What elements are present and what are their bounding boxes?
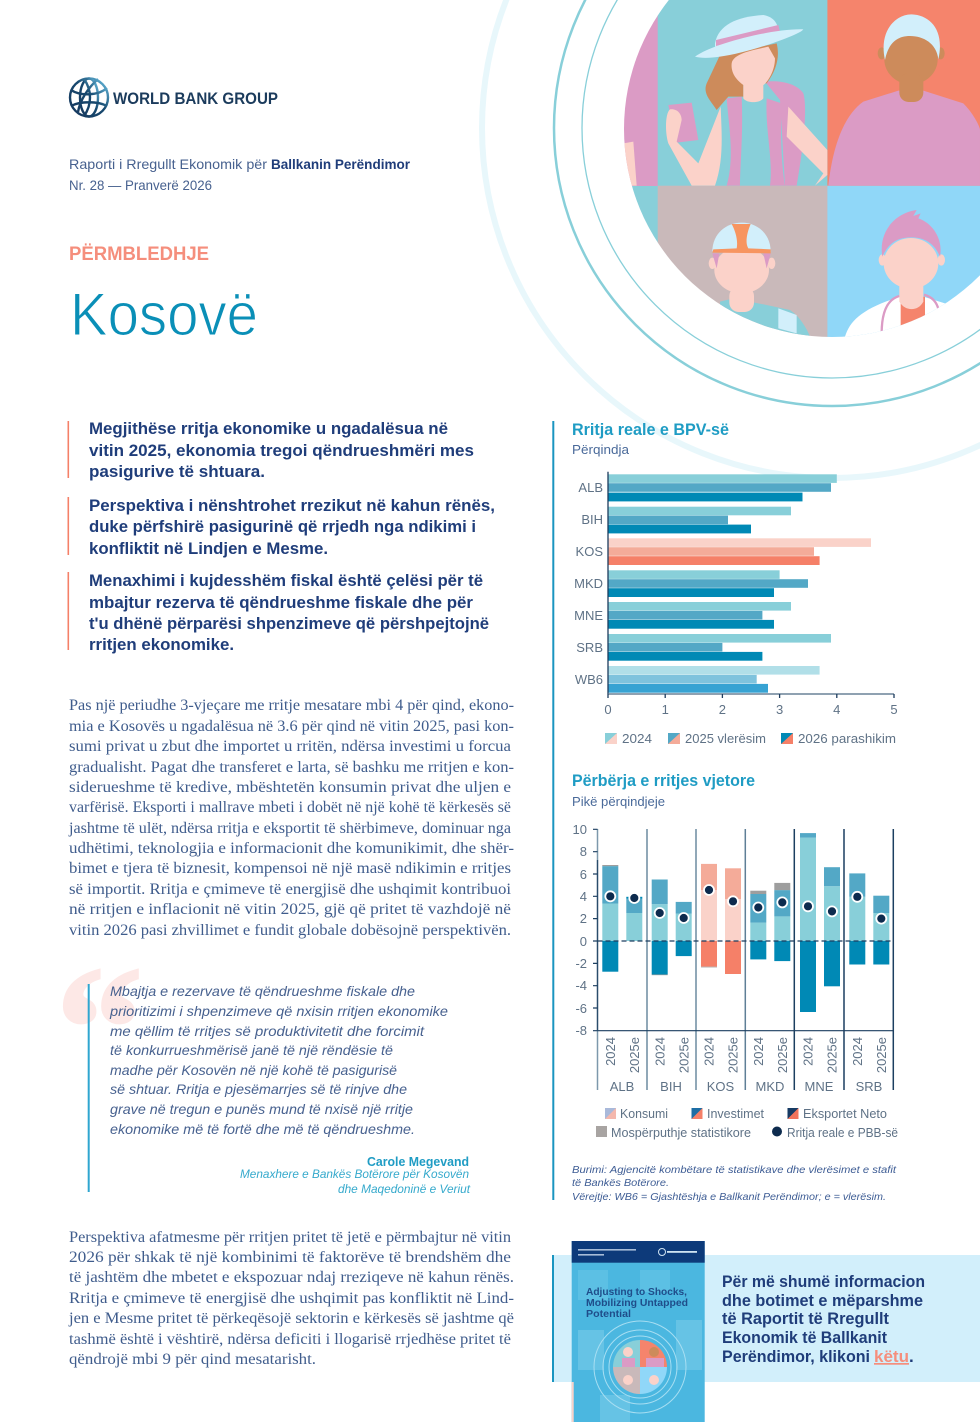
y-axis labels: 8 xyxy=(580,844,587,859)
country labels: BIH xyxy=(660,1079,682,1094)
y-axis labels: 10 xyxy=(573,822,587,837)
legend: real GDP growth: 2026 parashikim xyxy=(798,732,896,746)
category labels: BIH xyxy=(581,512,603,527)
bars: KOS xyxy=(608,538,871,565)
legend: real GDP growth: 2025 vlerësim xyxy=(685,732,766,746)
body paragraph 1: sumi privat u zbut dhe importet u rritën, ndërsa investimi u forcua xyxy=(69,738,511,755)
chart heading: growth composition: Përbërja e rritjes vjetore xyxy=(572,772,755,790)
y-axis labels: 2 xyxy=(580,911,587,926)
category labels: SRB xyxy=(576,640,603,655)
source and notes xyxy=(572,1164,897,1203)
report cover thumbnail xyxy=(572,1241,705,1422)
y-axis labels: 0 xyxy=(580,934,587,949)
body paragraph 2 xyxy=(68,1229,514,1368)
cover title: Potential xyxy=(586,1308,631,1320)
pull quote: Carole Megevand xyxy=(367,1155,469,1169)
country labels: MKD xyxy=(756,1079,784,1094)
key messages: rritjen ekonomike. xyxy=(89,635,234,654)
value labels: 3 xyxy=(776,702,783,717)
legend: growth composition: Mospërputhje statistikore xyxy=(611,1126,751,1140)
banner text: Perëndimor, klikoni xyxy=(722,1347,870,1366)
consumption bars xyxy=(602,838,889,941)
body paragraph 1: vitin 2026 pasi zhvillimet e fundit globale dobësojnë perspektivën. xyxy=(69,922,511,939)
bar chart: real GDP growth xyxy=(574,472,898,717)
legend: growth composition: Rritja reale e PBB-së xyxy=(787,1126,898,1140)
body paragraph 1: së importit. Rritja e çmimeve të energjisë dhe ushqimit kontribuoi xyxy=(69,881,512,898)
value labels xyxy=(604,702,898,717)
banner text xyxy=(722,1272,925,1366)
chart heading: growth composition: Pikë përqindjeje xyxy=(572,795,665,809)
year labels: 2024 xyxy=(603,1037,618,1066)
pull quote: madhe për Kosovën në një kohë të pasigurisë xyxy=(110,1062,397,1078)
y-axis labels: -2 xyxy=(575,956,587,971)
body paragraph 1: Pas një periudhe 3-vjeçare me rritje mesatare mbi 4 për qind, ekono- xyxy=(69,697,514,714)
source and notes: të Bankës Botërore. xyxy=(572,1177,669,1189)
key messages: konfliktit në Lindjen e Mesme. xyxy=(89,539,328,558)
value labels: 0 xyxy=(604,702,612,717)
bars: MKD xyxy=(608,570,808,597)
y-axis labels: -8 xyxy=(575,1023,587,1038)
y-axis labels: -6 xyxy=(575,1001,587,1016)
bars: BIH xyxy=(608,507,791,533)
cover illustration xyxy=(594,1321,686,1413)
key messages: Menaxhimi i kujdesshëm fiskal është çelësi për të xyxy=(89,571,483,590)
year labels: 2024 xyxy=(652,1037,667,1066)
category labels xyxy=(574,480,603,687)
pull quote: prioritizimi i shpenzimeve që nxisin rritjen ekonomike xyxy=(109,1003,448,1019)
year labels: 2024 xyxy=(801,1037,816,1066)
country labels xyxy=(610,1079,882,1094)
body paragraph 2: 2026 për shkak të një kombinimi të faktorëve të brendshëm dhe xyxy=(69,1249,511,1266)
y-axis labels: 6 xyxy=(580,867,587,882)
country labels: SRB xyxy=(856,1079,882,1094)
value labels: 4 xyxy=(833,702,840,717)
key messages: Perspektiva i nënshtrohet rrezikut në kahun rënës, xyxy=(89,496,495,515)
value labels: 2 xyxy=(719,702,726,717)
cover title xyxy=(586,1286,688,1320)
category labels: MNE xyxy=(574,608,603,623)
bars: WB6 xyxy=(608,666,820,693)
axes and separators xyxy=(593,829,893,1090)
body paragraph 1: jashtme të ulët, ndërsa rritja e eksportit të shërbimeve, dominuar nga xyxy=(68,820,511,837)
banner text: Për më shumë informacion xyxy=(722,1272,925,1291)
y-axis labels xyxy=(573,822,587,1038)
cover title: Mobilizing Untapped xyxy=(586,1297,688,1309)
statistical discrepancy bars xyxy=(602,865,790,975)
panel: more information banner xyxy=(552,1255,980,1382)
illustration: four workers in a circle xyxy=(620,0,980,346)
title: Kosovë xyxy=(70,281,258,348)
cover title: Adjusting to Shocks, xyxy=(586,1286,687,1298)
source and notes: Burimi: Agjencitë kombëtare të statistikave dhe vlerësimet e stafit xyxy=(572,1164,897,1176)
category labels: ALB xyxy=(578,480,603,495)
body paragraph 2: Rritja e çmimeve të energjisë dhe ushqimit pas konfliktit në Lind- xyxy=(69,1290,514,1307)
icon: quotation mark: “ xyxy=(56,931,143,1124)
decorative rings xyxy=(482,0,980,478)
pull quote: grave në tregun e punës mund të nxisë një rritje xyxy=(110,1101,413,1117)
banner text: Ekonomik të Ballkanit xyxy=(722,1328,887,1347)
key messages: mbajtur rezerva të qëndrueshme fiskale dhe për xyxy=(89,593,473,612)
pull quote: Mbajtja e rezervave të qëndrueshme fiskale dhe xyxy=(110,983,415,999)
legend: growth composition xyxy=(596,1107,898,1140)
y-axis labels: 4 xyxy=(580,889,587,904)
chart heading: real GDP growth: Përqindja xyxy=(572,443,629,457)
body paragraph 1: në rritjen e inflacionit në vitin 2025, gjë që pritet të vazhdojë në xyxy=(69,901,511,918)
icon: globe xyxy=(70,78,108,116)
year labels: 2024 xyxy=(702,1037,717,1066)
key messages: Megjithëse rritja ekonomike u ngadalësua në xyxy=(89,419,448,438)
year labels xyxy=(603,1037,889,1073)
pull quote: të konkurrueshmërisë janë të një rëndësie të xyxy=(110,1042,393,1058)
body paragraph 1 xyxy=(68,697,514,939)
logo: World Bank Group xyxy=(70,78,278,116)
report series line: Raporti i Rregullt Ekonomik për xyxy=(69,156,267,172)
year labels: 2025e xyxy=(874,1037,889,1073)
country labels: MNE xyxy=(805,1079,834,1094)
key messages: t'u dhënë përparësi shpenzimeve që përshpejtojnë xyxy=(89,614,489,633)
body paragraph 1: siderueshme të kredive, mbështetën konsumin privat dhe uljen e xyxy=(69,779,511,796)
category labels: MKD xyxy=(574,576,603,591)
legend: growth composition: Konsumi xyxy=(620,1107,668,1121)
pull quote: dhe Maqedoninë e Veriut xyxy=(338,1182,471,1196)
value labels: 1 xyxy=(662,702,669,717)
net export bars xyxy=(602,897,889,1012)
body paragraph 2: jen e Mesme pritet të përkeqësojë sektorin e kërkesës së jashtme që xyxy=(68,1310,514,1327)
body paragraph 2: qëndrojë mbi 9 për qind mesatarisht. xyxy=(69,1351,316,1368)
section label: PËRMBLEDHJE xyxy=(69,244,209,265)
investment bars xyxy=(602,833,889,923)
year labels: 2024 xyxy=(751,1037,766,1066)
report series line: Nr. 28 — Pranverë 2026 xyxy=(69,177,212,193)
panel rule: right column xyxy=(552,421,554,1200)
legend: real GDP growth xyxy=(605,732,896,746)
key messages: vitin 2025, ekonomia tregoi qëndrueshmëri mes xyxy=(89,441,474,460)
body paragraph 1: gradualisht. Pagat dhe transferet e larta, së bashku me rritjen e kon- xyxy=(69,759,514,776)
pull quote: me qëllim të rritjes së produktivitetit dhe forcimit xyxy=(110,1023,425,1039)
stacked bar chart: growth composition xyxy=(573,822,893,1094)
y-axis labels: -4 xyxy=(575,978,587,993)
chart heading: growth composition xyxy=(572,772,755,809)
year labels: 2025e xyxy=(825,1037,840,1073)
logo wordmark: WORLD BANK GROUP xyxy=(113,89,278,108)
axes xyxy=(608,472,894,698)
pull quote: Menaxhere e Bankës Botërore për Kosovën xyxy=(240,1167,469,1181)
bars: ALB xyxy=(608,474,837,501)
banner text: . xyxy=(909,1347,914,1366)
legend: growth composition: Eksportet Neto xyxy=(803,1107,887,1121)
pull quote xyxy=(56,931,471,1196)
body paragraph 1: udhëtimi, teknologjia e informacionit dhe komunikimit, dhe shër- xyxy=(69,840,514,857)
body paragraph 1: bimet e tjera të biznesit, kompensoi në një masë ndikimin e rritjes xyxy=(69,860,511,877)
year labels: 2025e xyxy=(726,1037,741,1073)
chart heading: real GDP growth xyxy=(572,421,729,457)
value labels: 5 xyxy=(890,702,898,717)
report series line xyxy=(69,156,411,193)
body paragraph 2: tashmë është i vështirë, ndërsa deficiti i llogarisë rrjedhëse pritet të xyxy=(69,1331,511,1348)
key messages: pasigurive të shtuara. xyxy=(89,462,265,481)
source and notes: Vërejtje: WB6 = Gjashtëshja e Ballkanit Perëndimor; e = vlerësim. xyxy=(572,1191,886,1203)
key messages: duke përfshirë pasigurinë që rrjedh nga ndikimi i xyxy=(89,517,476,536)
bars: SRB xyxy=(608,634,831,661)
pull quote: ekonomike më të fortë dhe më të qëndrueshme. xyxy=(110,1121,415,1137)
legend: real GDP growth: 2024 xyxy=(622,732,652,746)
category labels: WB6 xyxy=(575,672,603,687)
banner text: këtu xyxy=(874,1347,909,1366)
banner text: të Raportit të Rregullt xyxy=(722,1309,889,1328)
chart heading: real GDP growth: Rritja reale e BPV-së xyxy=(572,421,729,439)
body paragraph 2: Perspektiva afatmesme për rritjen pritet të jetë e përmbajtur në vitin xyxy=(69,1229,511,1246)
category labels: KOS xyxy=(576,544,603,559)
pull quote: së shtuar. Rritja e pjesëmarrjes së të rinjve dhe xyxy=(110,1081,407,1097)
legend: growth composition: Investimet xyxy=(707,1107,765,1121)
bars: MNE xyxy=(608,602,791,629)
year labels: 2025e xyxy=(627,1037,642,1073)
year labels: 2025e xyxy=(775,1037,790,1073)
real GDP growth markers xyxy=(605,885,886,924)
body paragraph 1: mia e Kosovës u ngadalësua në 3.6 për qind në vitin 2025, pasi kon- xyxy=(69,718,514,735)
year labels: 2024 xyxy=(850,1037,865,1066)
report series line: Ballkanin Perëndimor xyxy=(271,156,411,172)
country labels: KOS xyxy=(707,1079,735,1094)
banner text: dhe botimet e mëparshme xyxy=(722,1291,923,1310)
body paragraph 2: të jashtëm dhe mbetet e ekspozuar ndaj rreziqeve në kahun rënës. xyxy=(69,1269,514,1286)
key messages xyxy=(68,419,495,654)
body paragraph 1: varfërisë. Eksporti i mallrave mbeti i dobët në një kohë të kërkesës së xyxy=(69,799,511,816)
country labels: ALB xyxy=(610,1079,634,1094)
year labels: 2025e xyxy=(676,1037,691,1073)
